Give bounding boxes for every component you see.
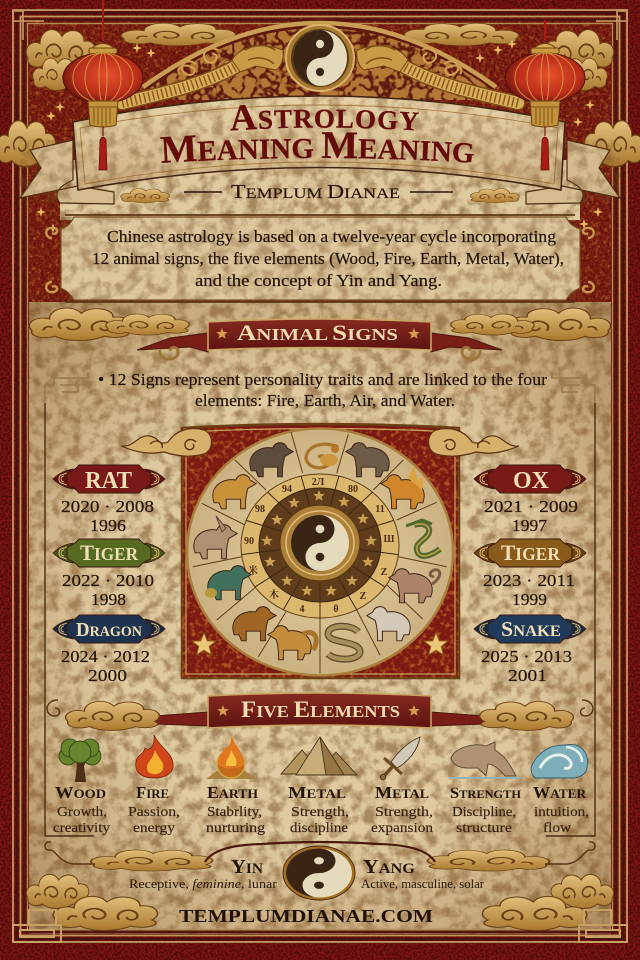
animal signs description: elements: Fire, Earth, Air, and Water. xyxy=(195,391,455,410)
right sign: ox: OX xyxy=(513,468,550,494)
icon: top yin yang medallion xyxy=(286,25,354,91)
animal: rat xyxy=(250,443,293,477)
ring glyphs: 98 xyxy=(255,504,265,515)
title: MEANING MEANING xyxy=(160,132,474,163)
element: wood: Growth, xyxy=(57,805,107,820)
zodiac wheel panel xyxy=(121,424,519,678)
element: earth xyxy=(206,735,265,836)
element: water: intuition, xyxy=(534,805,589,820)
left sign: rat: RAT xyxy=(85,468,132,494)
element: metal, sword: expansion xyxy=(371,821,433,836)
right sign: snake: 2025 · 2013 xyxy=(481,647,572,666)
dragon left xyxy=(122,46,283,103)
animal: golden creature xyxy=(268,626,316,660)
element: earth: EARTH xyxy=(207,783,258,802)
ornamental clouds, right side xyxy=(404,11,640,942)
left tail xyxy=(20,140,114,204)
icon: flame xyxy=(136,735,173,778)
animal: green dragon xyxy=(406,520,440,556)
right sign: ox xyxy=(474,465,586,535)
intro panel xyxy=(46,215,594,302)
element: wood: WOOD xyxy=(55,783,106,802)
heading banner: five elements xyxy=(66,693,573,730)
right sign: tiger xyxy=(474,539,586,609)
element: strength: STRENGTH xyxy=(450,785,522,802)
icon: wave xyxy=(531,744,588,778)
animal: rabbit xyxy=(194,516,237,559)
icon: flame over earth xyxy=(206,735,256,779)
dragon right xyxy=(357,46,518,103)
element: wood: creativity xyxy=(53,821,110,836)
panel scrolls xyxy=(121,428,519,456)
element: metal, sword: METAL xyxy=(375,783,429,802)
element: strength xyxy=(449,742,522,836)
ring dividers xyxy=(242,476,398,618)
left sign: tiger xyxy=(53,539,165,609)
animal: badger xyxy=(346,443,389,477)
right sign: ox: 1997 xyxy=(512,516,548,535)
title xyxy=(160,105,474,163)
element: strength: structure xyxy=(456,821,512,836)
corner scrolls xyxy=(46,228,594,292)
animal: curled creature xyxy=(306,444,339,468)
element: water: WATER xyxy=(533,783,587,802)
animal signs description: • 12 Signs represent personality traits and are linked to the four xyxy=(98,370,548,389)
ring glyphs: 木 xyxy=(269,588,279,601)
left sign: rat: 2020 · 2008 xyxy=(61,497,154,516)
element: metal, sword: Strength, xyxy=(375,805,433,820)
element: metal: METAL xyxy=(288,783,346,802)
intro text: and the concept of Yin and Yang. xyxy=(195,271,442,290)
yang label xyxy=(361,856,485,891)
ornamental clouds, left side xyxy=(0,11,236,942)
central yin yang xyxy=(280,505,360,581)
yin label: Receptive, feminine , lunar xyxy=(129,876,278,891)
animal signs description xyxy=(98,370,548,410)
yang label: Active, masculine, solar xyxy=(361,876,485,891)
element: fire xyxy=(128,735,180,836)
right sign: tiger: 2023 · 2011 xyxy=(483,571,575,590)
upper red ornamental area xyxy=(29,18,611,318)
star ring xyxy=(259,488,381,602)
left sign: tiger: 1998 xyxy=(91,590,126,609)
ring glyphs xyxy=(244,477,395,615)
animal: tiger xyxy=(213,475,256,509)
animal: lion xyxy=(233,607,276,641)
right sign: tiger: TIGER xyxy=(501,540,561,565)
footer website: TEMPLUMDIANAE.COM xyxy=(179,906,433,926)
wheel disc xyxy=(187,428,453,676)
ring glyphs: 90 xyxy=(244,536,254,547)
heading banner: animal signs: ANIMAL SIGNS xyxy=(237,320,398,345)
yin label xyxy=(129,856,278,891)
element: wood xyxy=(53,739,110,836)
year ring xyxy=(241,474,399,618)
icon: mountains xyxy=(281,737,357,775)
left sign: dragon: DRAGON xyxy=(76,619,142,641)
right sign: snake: 2001 xyxy=(508,666,547,685)
ring glyphs: θ xyxy=(333,604,339,615)
element: fire: FIRE xyxy=(136,783,169,802)
sparkle stars xyxy=(36,39,603,233)
ring glyphs: 11 xyxy=(375,504,385,515)
icon: tree xyxy=(59,739,101,782)
main scroll xyxy=(73,96,565,190)
parchment panel xyxy=(29,160,611,935)
animal: orange beast xyxy=(381,466,424,509)
icon: dolphin xyxy=(449,742,520,778)
element: earth: nurturing xyxy=(206,821,265,836)
ring glyphs: 80 xyxy=(348,484,358,495)
yin yang section xyxy=(129,842,485,900)
title: ASTROLOGY xyxy=(230,105,419,131)
animal: snake xyxy=(328,626,360,659)
intro text: Chinese astrology is based on a twelve-year cycle incorporating xyxy=(107,227,556,246)
left sign: rat: 1996 xyxy=(90,516,126,535)
element: metal: discipline xyxy=(290,821,348,836)
yang label: YANG xyxy=(363,856,415,878)
title banner xyxy=(20,96,620,204)
element: metal: Strength, xyxy=(291,805,349,820)
gold corner stars xyxy=(192,632,448,655)
left sign: dragon: 2024 · 2012 xyxy=(61,647,150,666)
scroll and panel texture xyxy=(20,96,620,300)
ring glyphs: 94 xyxy=(282,484,292,495)
ring glyphs: 2Л xyxy=(312,477,325,488)
animal: horse xyxy=(389,569,440,603)
element: earth: Stabrlity, xyxy=(207,805,262,820)
left sign: rat xyxy=(53,465,165,535)
element: fire: Passion, xyxy=(128,805,180,820)
animal: goat xyxy=(367,607,410,641)
lantern left xyxy=(63,0,143,170)
left sign: dragon xyxy=(53,615,165,685)
element: metal, sword xyxy=(371,737,433,836)
right tail xyxy=(526,140,620,204)
element: water: flow xyxy=(543,821,572,836)
element: water xyxy=(531,744,589,836)
icon: yin yang xyxy=(283,846,355,900)
right sign: ox: 2021 · 2009 xyxy=(484,497,578,516)
animals xyxy=(194,443,440,660)
ring glyphs: 4 xyxy=(300,604,304,615)
icon: sword xyxy=(380,737,420,780)
heading banner: animal signs xyxy=(137,319,502,359)
left sign: tiger: 2022 · 2010 xyxy=(62,571,154,590)
ring glyphs: 米 xyxy=(248,564,258,577)
intro text xyxy=(92,227,564,290)
right sign: tiger: 1999 xyxy=(512,590,547,609)
right sign: snake xyxy=(474,615,586,685)
ring glyphs: Z xyxy=(381,567,388,578)
ring glyphs: Ш xyxy=(384,534,395,545)
animal: teal creature xyxy=(205,566,251,600)
ring stars xyxy=(261,490,377,596)
yin label: YIN xyxy=(231,856,263,878)
element: fire: energy xyxy=(133,821,175,836)
left sign: tiger: TIGER xyxy=(80,540,139,565)
subtitle: TEMPLUM DIANAE xyxy=(231,181,400,203)
sector spokes xyxy=(193,432,447,673)
heading banner: five elements: FIVE ELEMENTS xyxy=(241,697,400,722)
top arch with dragons xyxy=(122,15,518,105)
lantern right xyxy=(505,20,585,170)
element: strength: Discipline, xyxy=(452,805,516,820)
right sign: snake: SNAKE xyxy=(501,617,561,641)
ring glyphs: Z xyxy=(360,591,367,602)
left sign: dragon: 2000 xyxy=(88,666,127,685)
element: metal xyxy=(281,737,357,836)
intro text: 12 animal signs, the five elements (Wood, Fire, Earth, Metal, Water), xyxy=(92,249,564,268)
